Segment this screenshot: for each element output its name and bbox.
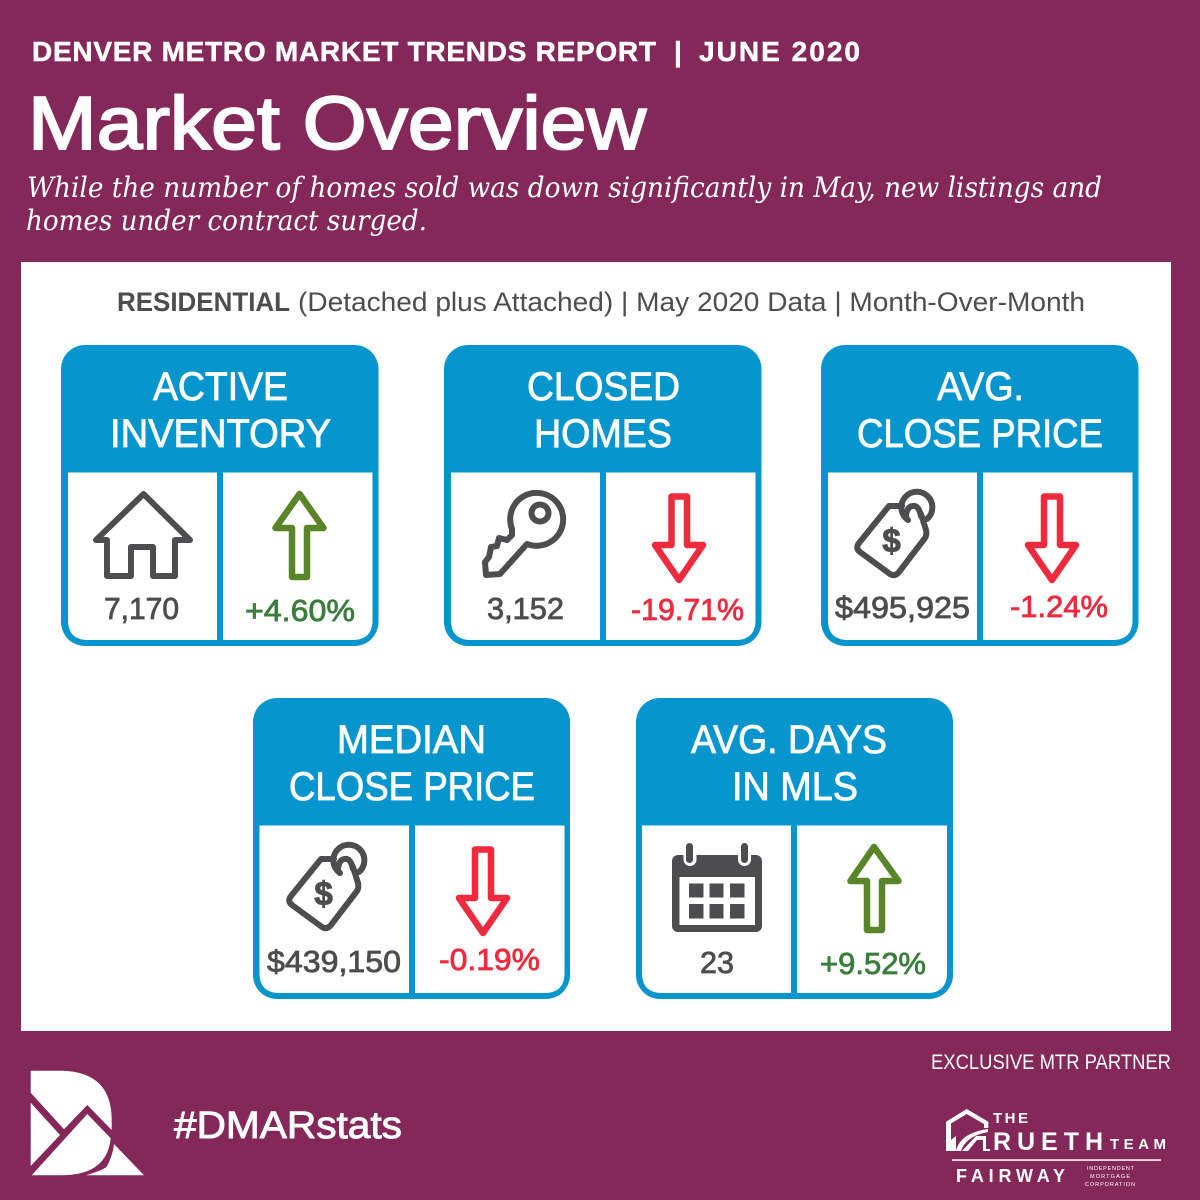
report heading: DENVER METRO MARKET TRENDS REPORT [32, 36, 656, 67]
icon: house mark [946, 1109, 990, 1151]
change: median close price: -0.19% [439, 942, 540, 977]
value: average days in MLS: 23 [700, 945, 734, 980]
subtitle: homes under contract surged. [26, 204, 427, 237]
heading: median close price [289, 718, 535, 809]
card: closed homes [444, 345, 762, 646]
data scope line: (Detached plus Attached) | May 2020 Data | Month-Over-Month [298, 287, 1085, 317]
logo: The Rueth Team, Fairway: INDEPENDENT [1087, 1166, 1135, 1172]
card: median close price [253, 698, 570, 999]
heading: average days in MLS: AVG. DAYS [691, 718, 887, 762]
heading: active inventory: INVENTORY [110, 412, 331, 456]
icon: price tag [857, 492, 932, 575]
hashtag: #DMARstats [174, 1105, 402, 1147]
change: average close price: -1.24% [1010, 589, 1108, 624]
subtitle: While the number of homes sold was down significantly in May, new listings and [27, 171, 1102, 204]
logo: The Rueth Team, Fairway: MORTGAGE [1090, 1174, 1130, 1180]
card: average close price [821, 345, 1138, 646]
arrow: up [276, 494, 324, 577]
value: average close price: $495,925 [835, 590, 970, 625]
heading: active inventory: ACTIVE [153, 365, 288, 409]
panel: residential data [21, 262, 1171, 1031]
heading: median close price: MEDIAN [337, 718, 486, 762]
report heading: | [674, 36, 682, 67]
heading: closed homes: HOMES [534, 412, 672, 456]
heading: median close price: CLOSE PRICE [289, 765, 535, 809]
icon: key [485, 493, 563, 575]
logo: DMAR [31, 1071, 144, 1175]
heading: average days in MLS [691, 718, 887, 809]
heading: average days in MLS: IN MLS [732, 765, 858, 809]
arrow: up [850, 847, 898, 930]
heading: active inventory [110, 365, 331, 456]
subtitle [26, 171, 1102, 237]
heading: closed homes [527, 365, 680, 456]
heading: average close price: CLOSE PRICE [857, 412, 1103, 456]
logo: The Rueth Team, Fairway: RUETH [993, 1128, 1103, 1156]
arrow: down [459, 850, 507, 933]
logo: The Rueth Team, Fairway: THE [993, 1110, 1028, 1127]
change: active inventory: +4.60% [245, 593, 355, 628]
change: closed homes: -19.71% [631, 592, 744, 627]
logo: The Rueth Team, Fairway: FAIRWAY [956, 1166, 1065, 1186]
icon: house [96, 494, 190, 576]
heading: average close price [857, 365, 1103, 456]
heading: average close price: AVG. [937, 365, 1024, 409]
arrow: down [1028, 496, 1076, 580]
report heading: JUNE 2020 [699, 36, 860, 67]
heading: closed homes: CLOSED [527, 365, 680, 409]
logo: The Rueth Team, Fairway: TEAM [1110, 1136, 1166, 1153]
icon: price tag [289, 845, 364, 928]
icon: price tag: $ [314, 875, 333, 912]
change: average days in MLS: +9.52% [820, 946, 926, 981]
title: Market Overview [28, 81, 647, 165]
value: closed homes: 3,152 [487, 591, 564, 626]
value: median close price: $439,150 [267, 944, 401, 979]
logo: The Rueth Team, Fairway: CORPORATION [1085, 1182, 1135, 1188]
data scope line: RESIDENTIAL [117, 287, 290, 317]
card: average days in MLS [636, 698, 953, 999]
arrow: down [655, 496, 703, 580]
partner label: EXCLUSIVE MTR PARTNER [931, 1051, 1171, 1074]
icon: price tag: $ [882, 522, 901, 559]
card: active inventory [61, 345, 378, 646]
value: active inventory: 7,170 [104, 591, 179, 626]
icon: calendar [672, 840, 762, 932]
logo: The Rueth Team, Fairway [946, 1109, 1166, 1188]
